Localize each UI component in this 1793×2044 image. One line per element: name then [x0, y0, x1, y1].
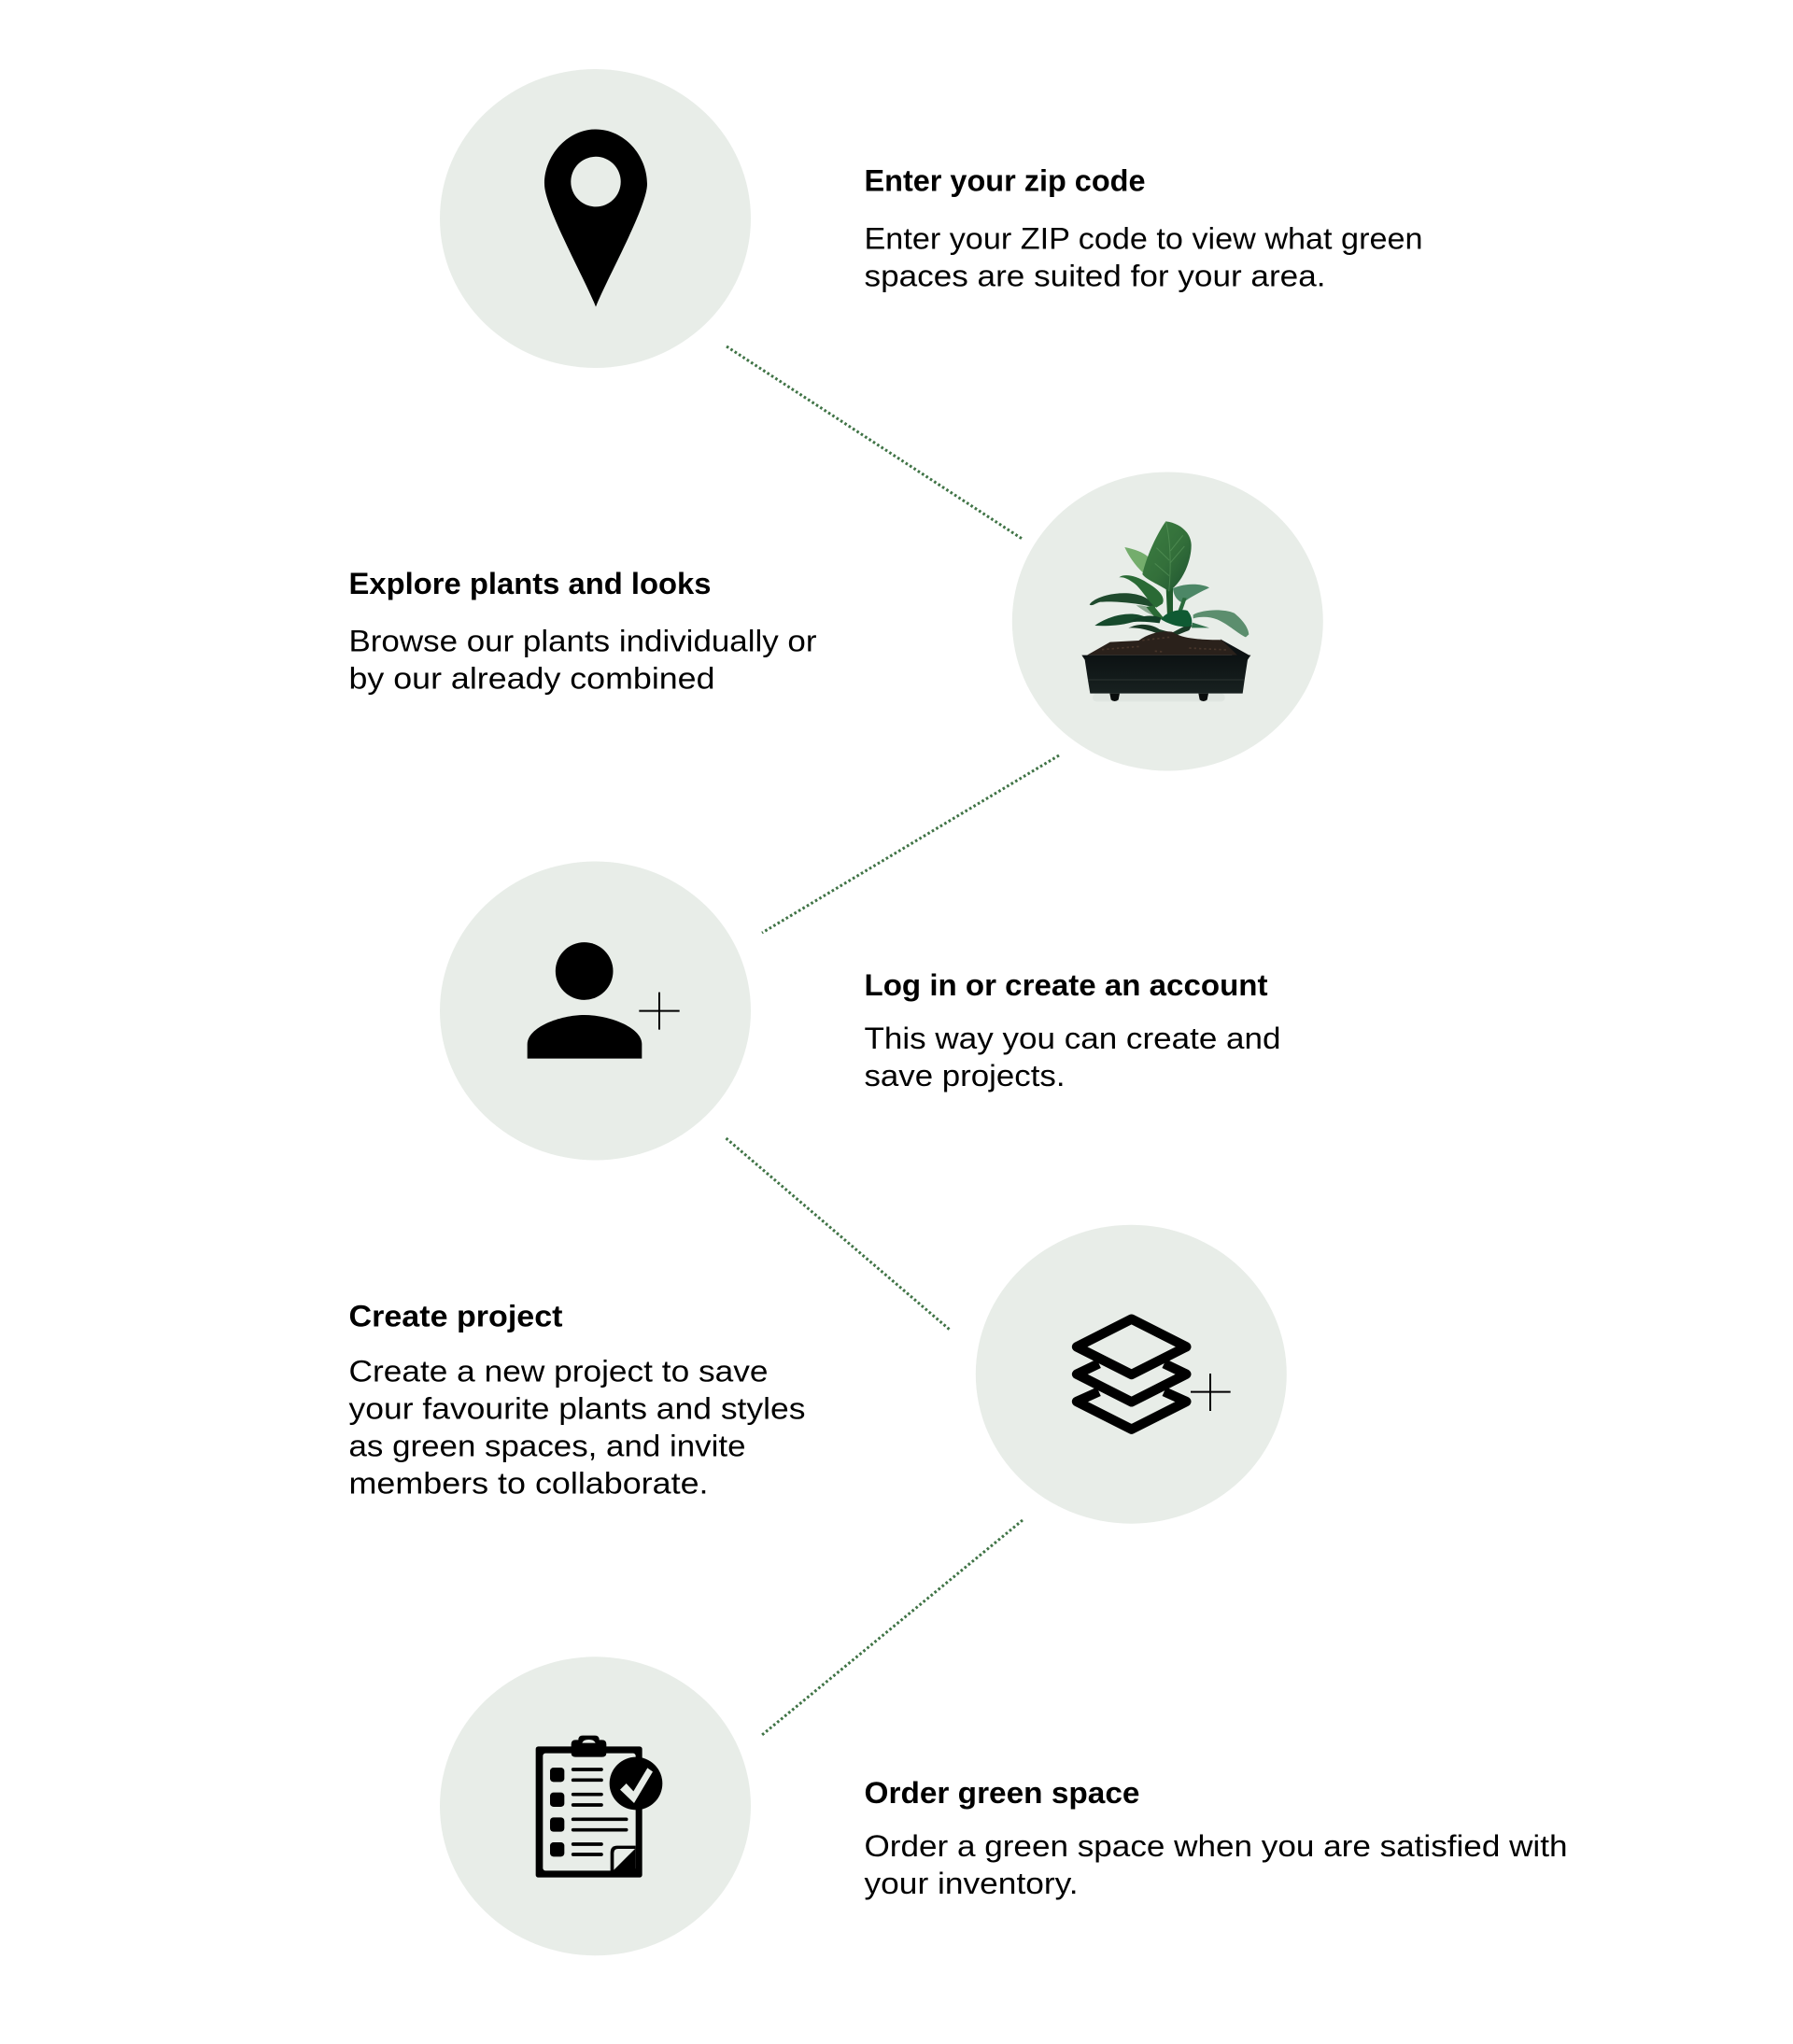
icon: checklist clipboard: [536, 1736, 662, 1878]
body line 2: spaces are suited for your area.: [865, 260, 1326, 293]
circle background: [440, 1656, 751, 1955]
heading: Create project: [349, 1300, 563, 1333]
body line 3: as green spaces, and invite: [349, 1429, 745, 1462]
connector arrow: step 1 to step 2: [727, 346, 1024, 540]
heading: Order green space: [865, 1776, 1139, 1810]
connector arrow: step 2 to step 3: [762, 755, 1059, 933]
icon: add user: [528, 942, 680, 1059]
panel: step 3 account: [440, 861, 1281, 1160]
panel: step 5 order: [440, 1656, 1567, 1955]
connector arrow: step 4 to step 5: [762, 1520, 1023, 1735]
heading: Explore plants and looks: [349, 567, 712, 600]
text: explore plants and looks: [349, 567, 817, 695]
text: create project: [349, 1300, 805, 1500]
icon: add layers: [1077, 1319, 1231, 1430]
panel: step 1 location: [440, 69, 1423, 368]
body line 2: your favourite plants and styles: [349, 1391, 805, 1425]
body line 2: your inventory.: [865, 1867, 1078, 1900]
body line 1: Create a new project to save: [349, 1354, 768, 1388]
body line 4: members to collaborate.: [349, 1466, 708, 1500]
text: log in or create an account: [865, 968, 1281, 1092]
panel: step 2 plants: [349, 472, 1323, 771]
panel: step 4 project: [349, 1225, 1287, 1524]
circle background: [976, 1225, 1287, 1524]
text: order green space: [865, 1776, 1567, 1900]
circle background: [440, 861, 751, 1160]
body line 2: save projects.: [865, 1059, 1065, 1092]
circle background: [440, 69, 751, 368]
icon: map pin: [544, 129, 647, 307]
heading: Log in or create an account: [865, 968, 1268, 1002]
circle background: [1012, 472, 1323, 771]
body line 1: Order a green space when you are satisfied with: [865, 1829, 1567, 1863]
icon: potted plant: [1081, 521, 1250, 701]
body line 1: Enter your ZIP code to view what green: [865, 222, 1423, 256]
body line 2: by our already combined: [349, 661, 715, 695]
text: enter your zip code: [865, 164, 1423, 293]
heading: Enter your zip code: [865, 164, 1145, 198]
body line 1: This way you can create and: [865, 1022, 1281, 1055]
body line 1: Browse our plants individually or: [349, 624, 817, 657]
connector arrow: step 3 to step 4: [727, 1138, 950, 1330]
